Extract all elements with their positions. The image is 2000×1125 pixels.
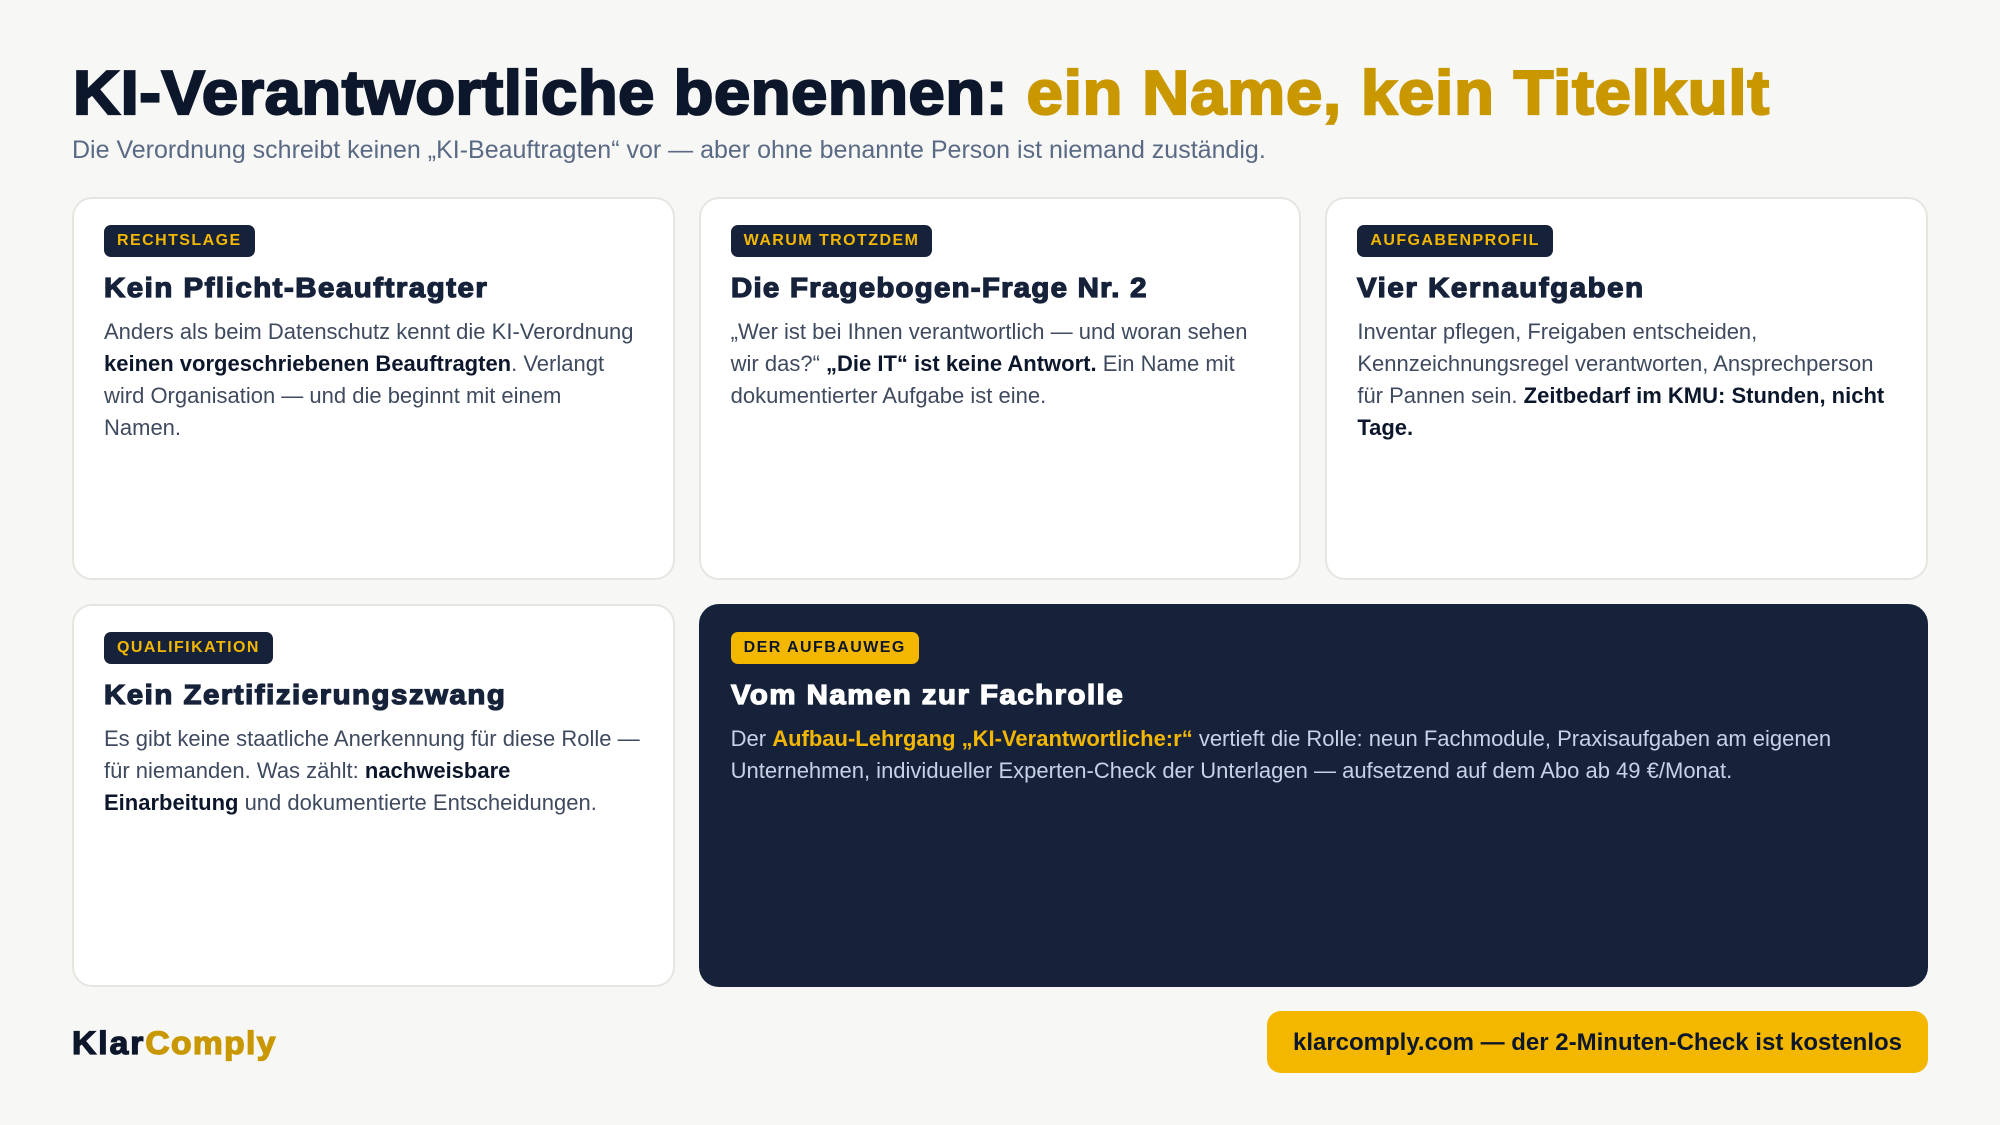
tag: Aufgabenprofil [1357, 225, 1553, 257]
tag: Der Aufbauweg [731, 632, 919, 664]
tag: Der Aufbauweg: DER AUFBAUWEG [744, 639, 906, 656]
panel: Qualifikation [72, 604, 675, 987]
card heading: Kein Zertifizierungszwang [104, 679, 506, 710]
panel: Rechtslage [72, 197, 675, 580]
panel: Der Aufbauweg [699, 604, 1928, 987]
tag: Warum trotzdem: WARUM TROTZDEM [744, 232, 919, 249]
card text: Anders als beim Datenschutz kennt die KI-Verordnung keinen vorgeschriebenen Beauftragten. Verlangt wird Organisation — und die beginnt mit einem Namen. [104, 319, 634, 440]
tag: Qualifikation [104, 632, 273, 664]
call to action [1267, 1011, 1928, 1073]
card text: Es gibt keine staatliche Anerkennung für diese Rolle — für niemanden. Was zählt: nachweisbare Einarbeitung und dokumentierte Entscheidungen. [104, 726, 640, 815]
title: KI-Verantwortliche benennen: ein Name, kein Titelkult [73, 59, 1770, 128]
card text: „Wer ist bei Ihnen verantwortlich — und woran sehen wir das?“ „Die IT“ ist keine Antwort. Ein Name mit dokumentierter Aufgabe ist eine. [731, 319, 1248, 408]
panel: Warum trotzdem [699, 197, 1301, 580]
tag: Rechtslage: RECHTSLAGE [117, 232, 242, 249]
card heading: Vier Kernaufgaben [1357, 272, 1645, 303]
card text: Der Aufbau-Lehrgang „KI-Verantwortliche:r“ vertieft die Rolle: neun Fachmodule, Praxisaufgaben am eigenen Unternehmen, individueller Experten-Check der Unterlagen — aufsetzend auf dem Abo ab 49 €/Monat. [731, 726, 1831, 783]
call to action: klarcomply.com — der 2-Minuten-Check ist kostenlos [1293, 1029, 1902, 1056]
card heading: Vom Namen zur Fachrolle [731, 679, 1124, 710]
panel: Aufgabenprofil [1325, 197, 1928, 580]
subtitle: Die Verordnung schreibt keinen „KI-Beauftragten“ vor — aber ohne benannte Person ist niemand zuständig. [72, 136, 1266, 164]
tag: Qualifikation: QUALIFIKATION [117, 639, 260, 656]
card heading: Die Fragebogen-Frage Nr. 2 [731, 272, 1147, 303]
logo: KlarComply [72, 1025, 277, 1061]
card heading: Kein Pflicht-Beauftragter [104, 272, 488, 303]
tag: Rechtslage [104, 225, 255, 257]
tag: Warum trotzdem [731, 225, 932, 257]
tag: Aufgabenprofil: AUFGABENPROFIL [1370, 232, 1540, 249]
card text: Inventar pflegen, Freigaben entscheiden, Kennzeichnungsregel verantworten, Ansprechperson für Pannen sein. Zeitbedarf im KMU: Stunden, nicht Tage. [1357, 319, 1884, 440]
